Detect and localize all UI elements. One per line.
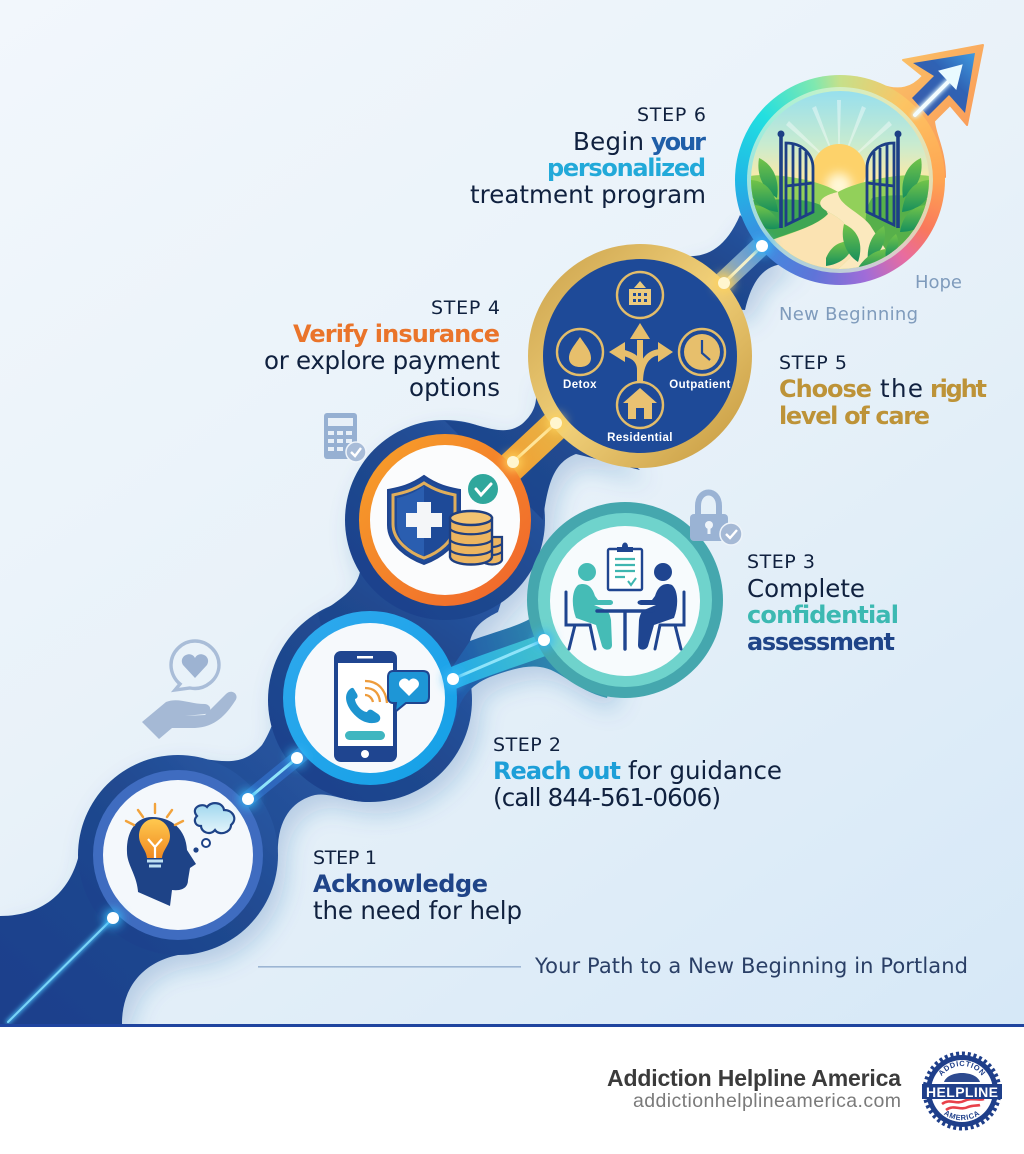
label: new beginning: New Beginning (779, 304, 918, 325)
step 4 circle (359, 434, 531, 606)
text: step 5: level of care (779, 402, 930, 430)
text: step 2: for guidance (628, 756, 782, 785)
tagline: Your Path to a New Beginning in Portland (534, 954, 968, 978)
text: step 2 (493, 734, 782, 812)
branching arrows (609, 323, 673, 383)
icon: hand holding heart bubble (142, 641, 237, 739)
text: step 5 (779, 352, 987, 430)
footer url: addictionhelplineamerica.com (633, 1090, 901, 1112)
text: step 6: your (651, 128, 706, 156)
step 3 circle (527, 502, 723, 698)
drop (569, 337, 591, 367)
footer rule (0, 1024, 1024, 1027)
logo badge: ADDICTION (939, 1060, 986, 1076)
arrow head (880, 45, 983, 177)
glowing light trail (8, 65, 962, 1022)
text: step 5: STEP 5 (779, 352, 847, 374)
icon: care level options (557, 272, 731, 444)
text: step 4: STEP 4 (431, 297, 500, 319)
text: step 3: Complete (747, 574, 865, 603)
icon: insurance shield with coins and check (388, 474, 502, 564)
icon: padlock with check (690, 492, 742, 545)
icon: two people at table with clipboard (566, 542, 684, 650)
house (623, 388, 657, 419)
text: step 4: options (409, 373, 500, 402)
text: step 1: STEP 1 (313, 847, 377, 869)
ribbon: connecting bands (240, 232, 776, 805)
icon: calculator with check (324, 413, 366, 462)
step 5 circle (528, 244, 752, 468)
icon: phone with call and chat bubble (334, 651, 429, 762)
text: step 2: Reach out (493, 757, 621, 785)
text: step 5: Choose (779, 375, 872, 403)
step 6 scene: open gates at sunrise (747, 87, 933, 273)
text: step 3 (747, 551, 899, 656)
step 2 circle (283, 611, 457, 785)
text: step 6: personalized (547, 154, 706, 182)
text: step 6 (470, 104, 706, 209)
text: step 4: Verify insurance (293, 320, 500, 348)
label: hope: Hope (915, 272, 962, 293)
text: step 1: the need for help (313, 896, 522, 925)
text: step 6: STEP 6 (637, 104, 706, 126)
text: step 5: the (880, 374, 923, 403)
text: step 2: (call 844-561-0606) (493, 783, 721, 812)
logo badge: HELPLINE (926, 1084, 998, 1100)
text: step 2: STEP 2 (493, 734, 561, 756)
icon: head with lightbulb and thought cloud (126, 803, 234, 906)
tagline rule (258, 966, 521, 968)
step 1 circle (93, 770, 263, 940)
text: step 4: or explore payment (264, 346, 500, 375)
text: step 3: assessment (747, 628, 895, 656)
clock (684, 334, 720, 370)
text: step 1 (313, 847, 522, 925)
text: step 1: Acknowledge (313, 870, 488, 898)
text: step 3: confidential (747, 601, 899, 629)
text: step 5: right (930, 375, 987, 403)
footer panel (0, 1027, 1024, 1154)
text: step 3: STEP 3 (747, 551, 815, 573)
label: residential: Residential (607, 432, 673, 444)
building (629, 281, 651, 305)
label: outpatient: Outpatient (669, 379, 731, 391)
footer brand name: Addiction Helpline America (607, 1065, 901, 1091)
label: detox: Detox (563, 379, 597, 391)
text: step 6: Begin (573, 127, 644, 156)
text: step 4 (264, 297, 500, 402)
step 6 rainbow ring (735, 75, 945, 285)
logo badge: AMERICA (944, 1110, 980, 1120)
logo badge (922, 1052, 1002, 1130)
text: step 6: treatment program (470, 180, 706, 209)
glowing nodes (104, 237, 771, 927)
winding path ribbon (0, 215, 790, 1024)
